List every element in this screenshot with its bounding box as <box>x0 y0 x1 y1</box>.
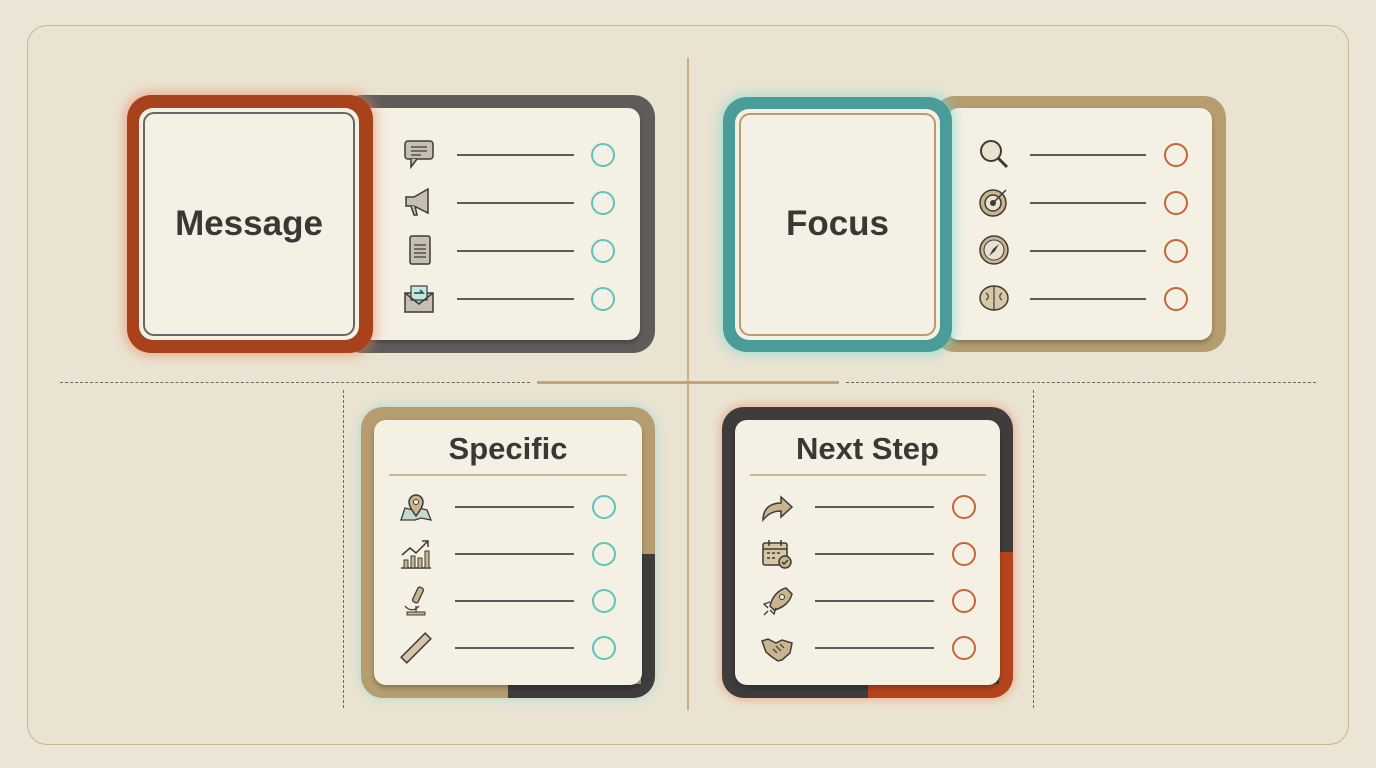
icon list: Message <box>404 140 615 313</box>
panel: Focus <box>714 88 1226 362</box>
panel: Specific <box>361 407 655 698</box>
heading: Specific: Specific <box>449 431 567 466</box>
heading: Message: Message <box>175 204 323 243</box>
divider horizontal left <box>60 382 530 383</box>
panel: Next Step <box>722 407 1013 698</box>
heading: Next Step: Next Step <box>796 431 939 466</box>
icon list: Focus <box>979 140 1188 311</box>
panel: Message <box>118 86 655 362</box>
icon list: Next Step <box>761 495 976 662</box>
divider vertical <box>687 58 689 710</box>
icon list: Specific <box>400 494 616 664</box>
heading: Focus: Focus <box>786 204 889 243</box>
